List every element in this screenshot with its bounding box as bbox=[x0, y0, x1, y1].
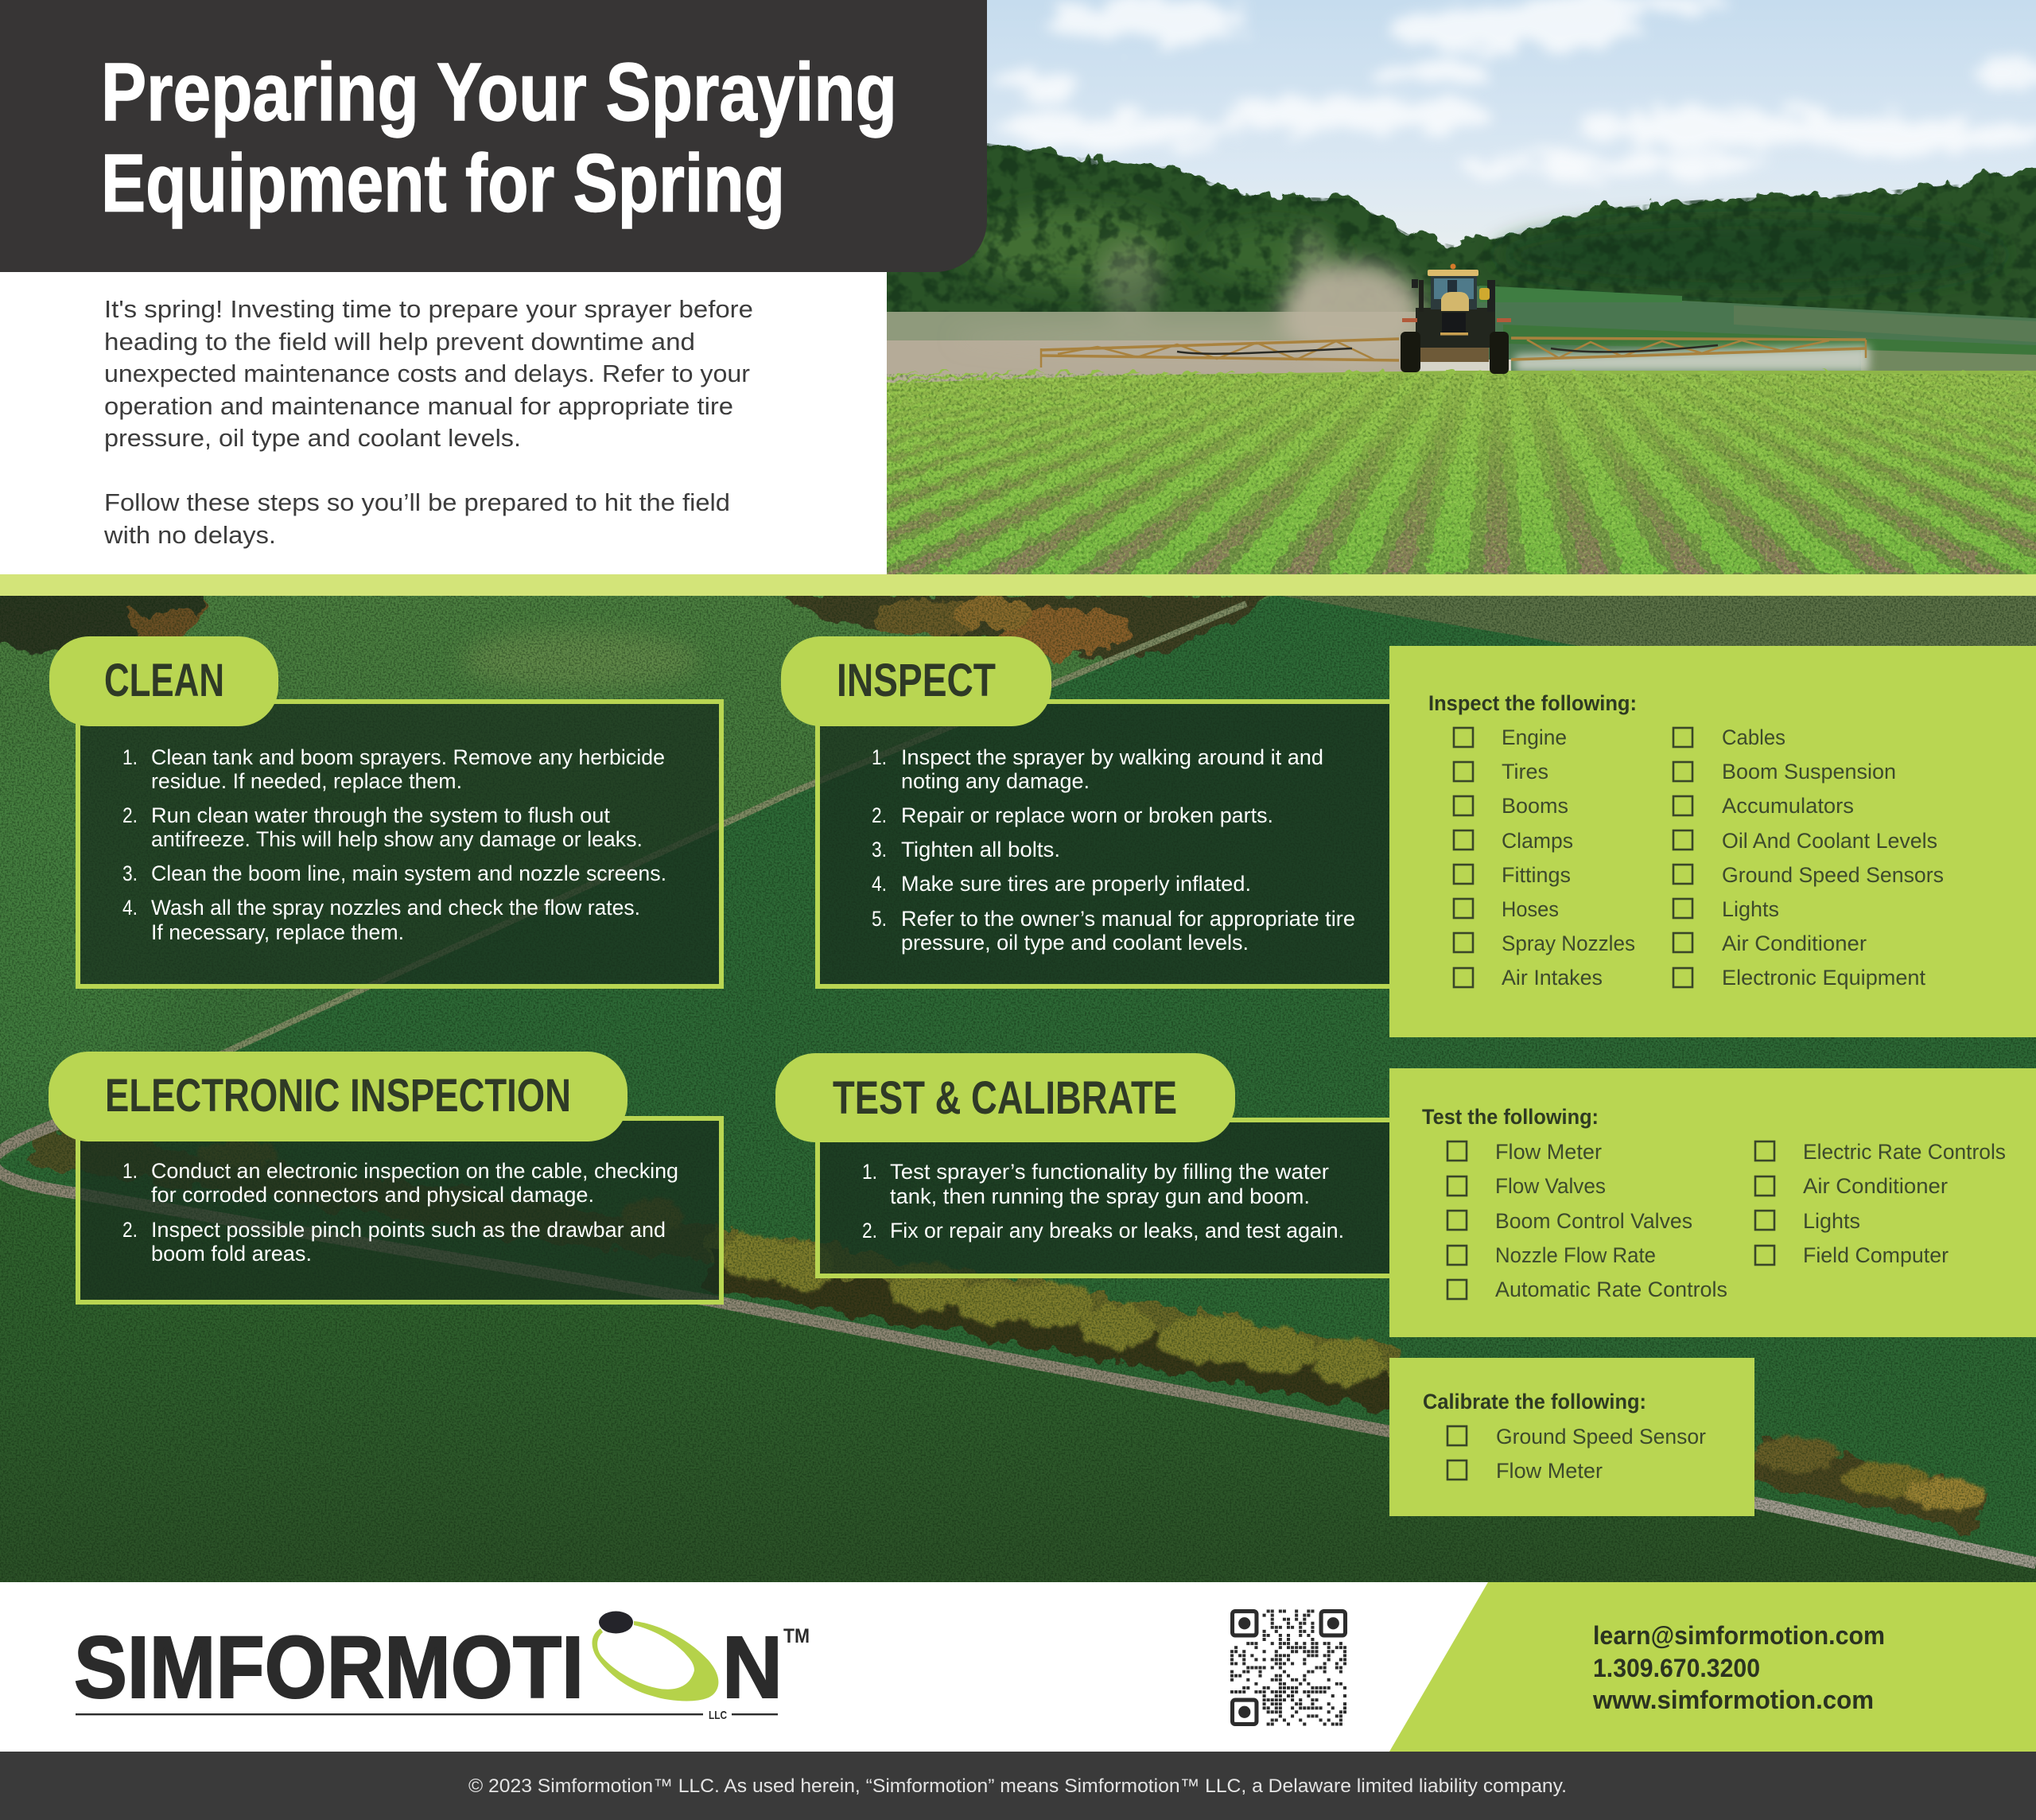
right boom bbox=[1511, 338, 1866, 360]
checklist column one: Booms bbox=[1502, 794, 1568, 818]
photo: sprayer in corn field bbox=[887, 0, 2036, 574]
QR code bbox=[1230, 1612, 1347, 1724]
wheels bbox=[1401, 332, 1420, 372]
checklist panel: calibrate the following bbox=[1389, 1358, 1754, 1516]
electronic inspection steps bbox=[122, 1159, 678, 1266]
intro text: heading to the field will help prevent downtime and bbox=[104, 328, 695, 356]
electronic inspection steps: boom fold areas. bbox=[151, 1242, 312, 1266]
clean steps: Clean the boom line, main system and nozzle screens. bbox=[151, 861, 666, 885]
title bbox=[101, 46, 897, 229]
test checklist column two: Electric Rate Controls bbox=[1803, 1140, 2006, 1164]
intro text: It's spring! Investing time to prepare your sprayer before bbox=[104, 295, 753, 323]
logo: Simformotion: TM bbox=[783, 1625, 810, 1647]
cab bbox=[1419, 280, 1424, 312]
inspect steps bbox=[872, 745, 1355, 955]
logo: Simformotion: N bbox=[722, 1619, 783, 1717]
test and calibrate heading pill bbox=[775, 1053, 1235, 1142]
crop field with rows bbox=[887, 368, 2036, 574]
test and calibrate steps bbox=[862, 1160, 1344, 1242]
checklist column two: Accumulators bbox=[1722, 794, 1854, 818]
intro text: pressure, oil type and coolant levels. bbox=[104, 424, 521, 452]
clean heading pill bbox=[49, 636, 278, 726]
checklist column one: Engine bbox=[1502, 725, 1567, 749]
checklist column one: Tires bbox=[1502, 760, 1548, 784]
test checklist column one: Flow Valves bbox=[1495, 1174, 1606, 1198]
dust plumes bbox=[1024, 223, 1431, 340]
intro text: with no delays. bbox=[103, 521, 276, 549]
inspect steps: 2. bbox=[872, 803, 887, 827]
section: inspect bbox=[781, 636, 1398, 986]
southern field bbox=[0, 1180, 2036, 1582]
email: learn@simformotion.com bbox=[1593, 1621, 1885, 1650]
checklist column two: Air Conditioner bbox=[1722, 931, 1867, 955]
phone: 1.309.670.3200 bbox=[1593, 1654, 1760, 1682]
grille bbox=[1442, 313, 1466, 332]
inspect steps: Repair or replace worn or broken parts. bbox=[901, 803, 1273, 827]
checklist column two: Lights bbox=[1722, 897, 1779, 921]
inspect steps: Inspect the sprayer by walking around it and bbox=[901, 745, 1323, 769]
test and calibrate steps: tank, then running the spray gun and boom. bbox=[890, 1184, 1310, 1208]
checklist column one: Fittings bbox=[1502, 863, 1571, 887]
contact panel bbox=[1389, 1582, 2036, 1752]
diagonal track bbox=[57, 604, 1246, 1124]
north-east olive field bbox=[1280, 596, 2036, 660]
logo: Simformotion: LLC bbox=[709, 1709, 727, 1722]
test and calibrate steps: Test sprayer’s functionality by filling the water bbox=[890, 1160, 1329, 1184]
clean steps: residue. If needed, replace them. bbox=[151, 769, 462, 793]
electronic inspection steps: Inspect possible pinch points such as the drawbar and bbox=[151, 1218, 666, 1242]
woods top-centre bbox=[783, 593, 1272, 664]
inspect steps: Refer to the owner’s manual for appropriate tire bbox=[901, 907, 1355, 931]
clean steps bbox=[122, 745, 666, 944]
checklist panel: inspect the following bbox=[1389, 646, 2036, 1037]
tail lights bbox=[1402, 318, 1417, 322]
intro text: unexpected maintenance costs and delays. Refer to your bbox=[104, 360, 750, 387]
light patch in field bbox=[461, 630, 700, 690]
section: electronic inspection bbox=[49, 1052, 721, 1302]
clean steps: 2. bbox=[122, 803, 138, 827]
test checklist column two: Air Conditioner bbox=[1803, 1174, 1948, 1198]
logo dot bbox=[599, 1612, 633, 1634]
clean steps: 3. bbox=[122, 861, 138, 885]
logo ring bbox=[593, 1621, 718, 1701]
checklist panel: calibrate the following: Flow Meter bbox=[1496, 1459, 1603, 1483]
website: www.simformotion.com bbox=[1592, 1686, 1874, 1714]
electronic inspection heading pill bbox=[49, 1052, 628, 1141]
logo: Simformotion bbox=[74, 1612, 810, 1722]
leaf texture bbox=[887, 374, 2036, 574]
distant tree line bbox=[887, 143, 2036, 318]
inspect steps: Tighten all bolts. bbox=[901, 838, 1060, 861]
road far section bbox=[1754, 1503, 2036, 1563]
inspect steps: Make sure tires are properly inflated. bbox=[901, 872, 1251, 896]
copyright bar bbox=[0, 1752, 2036, 1820]
footer band bbox=[0, 1582, 2036, 1752]
intro text: Follow these steps so you’ll be prepared to hit the field bbox=[104, 488, 730, 516]
cab roof bbox=[1428, 270, 1478, 276]
test checklist column one: Nozzle Flow Rate bbox=[1495, 1243, 1656, 1267]
photo: aerial farmland background bbox=[0, 573, 2036, 1582]
clean steps: Wash all the spray nozzles and check the flow rates. bbox=[151, 896, 640, 920]
hedgerow bbox=[32, 1139, 1984, 1511]
checklist column one: Air Intakes bbox=[1502, 966, 1603, 990]
field grain bbox=[0, 596, 2036, 1582]
electronic inspection steps: 2. bbox=[122, 1218, 138, 1242]
test checklist column one: Automatic Rate Controls bbox=[1495, 1278, 1727, 1301]
checklist panel: inspect the following: Inspect the following: bbox=[1428, 691, 1637, 715]
checklist panel: calibrate the following: Ground Speed Sensor bbox=[1496, 1425, 1706, 1449]
test checklist column two: Field Computer bbox=[1803, 1243, 1949, 1267]
brighter left field edge bbox=[0, 748, 175, 1130]
test and calibrate steps: 2. bbox=[862, 1219, 877, 1242]
intro text bbox=[103, 295, 753, 549]
north-west field bbox=[0, 596, 1272, 1161]
title: Preparing Your Spraying bbox=[101, 46, 897, 138]
inspect heading pill bbox=[781, 636, 1051, 726]
test checklist column two: Lights bbox=[1803, 1209, 1860, 1233]
test checklist column two bbox=[1755, 1140, 2006, 1267]
logo: Simformotion: SIMFORMOTI bbox=[74, 1619, 584, 1717]
spray mist bbox=[1515, 345, 1869, 372]
inspect heading pill: INSPECT bbox=[837, 655, 996, 706]
intro text: operation and maintenance manual for appropriate tire bbox=[104, 392, 733, 420]
central field bbox=[0, 596, 2036, 1582]
checklist column two: Electronic Equipment bbox=[1722, 966, 1925, 990]
checklist column two bbox=[1673, 725, 1944, 990]
electronic inspection heading pill: ELECTRONIC INSPECTION bbox=[105, 1070, 571, 1122]
electronic inspection steps: 1. bbox=[122, 1159, 138, 1183]
beacon bbox=[1451, 264, 1455, 269]
inspect steps: 5. bbox=[872, 907, 887, 931]
sprayer machine bbox=[1041, 264, 1866, 374]
hood bbox=[1441, 292, 1469, 311]
checklist panel: test the following bbox=[1389, 1068, 2036, 1337]
clean steps: 4. bbox=[122, 896, 138, 920]
inspect steps: noting any damage. bbox=[901, 769, 1090, 793]
corn rows bbox=[0, 372, 2036, 574]
checklist column two: Ground Speed Sensors bbox=[1722, 863, 1944, 887]
woods top-left bbox=[0, 573, 203, 652]
electronic inspection panel box bbox=[78, 1118, 721, 1302]
section: test and calibrate bbox=[775, 1053, 1398, 1276]
checklist column one: Hoses bbox=[1502, 897, 1559, 921]
clean steps: Run clean water through the system to flush out bbox=[151, 803, 611, 827]
checklist column two: Boom Suspension bbox=[1722, 760, 1896, 784]
section: clean bbox=[49, 636, 721, 986]
clean steps: If necessary, replace them. bbox=[151, 920, 404, 944]
copyright bar: © 2023 Simformotion™ LLC. As used herein, “Simformotion” means Simformotion™ LLC, a Delaware limited liability company. bbox=[468, 1775, 1567, 1797]
under-frame bbox=[1420, 347, 1489, 362]
test checklist column one: Boom Control Valves bbox=[1495, 1209, 1692, 1233]
clean panel box bbox=[78, 702, 721, 986]
clean steps: Clean tank and boom sprayers. Remove any herbicide bbox=[151, 745, 665, 769]
checklist column one: Spray Nozzles bbox=[1502, 931, 1635, 955]
intro panel background bbox=[0, 272, 887, 574]
inspect panel box bbox=[818, 702, 1398, 986]
test and calibrate heading pill: TEST & CALIBRATE bbox=[833, 1072, 1177, 1124]
checklist column one bbox=[1454, 725, 1635, 990]
test and calibrate steps: Fix or repair any breaks or leaks, and test again. bbox=[890, 1219, 1344, 1242]
soil furrows bbox=[290, 372, 2036, 574]
accent strip bbox=[0, 574, 2036, 596]
inspect steps: 1. bbox=[872, 745, 887, 769]
checklist column two: Cables bbox=[1722, 725, 1785, 749]
inspect steps: pressure, oil type and coolant levels. bbox=[901, 931, 1249, 955]
inspect steps: 4. bbox=[872, 872, 887, 896]
test checklist column one: Flow Meter bbox=[1495, 1140, 1602, 1164]
tractor body bbox=[1416, 308, 1495, 348]
checklist panel: test the following: Test the following: bbox=[1422, 1105, 1599, 1129]
mist under machine bbox=[1419, 360, 1511, 371]
road bbox=[0, 1124, 2036, 1563]
electronic inspection steps: for corroded connectors and physical damage. bbox=[151, 1183, 594, 1207]
clean steps: antifreeze. This will help show any damage or leaks. bbox=[151, 827, 643, 851]
checklist panel: calibrate the following: Calibrate the following: bbox=[1423, 1390, 1646, 1414]
inspect steps: 3. bbox=[872, 838, 887, 861]
side tank bbox=[1479, 288, 1490, 300]
electronic inspection steps: Conduct an electronic inspection on the cable, checking bbox=[151, 1159, 678, 1183]
sky with clouds bbox=[987, 0, 2036, 248]
boom hoses bbox=[1177, 345, 1718, 354]
title banner bbox=[0, 0, 987, 272]
background fields bbox=[887, 286, 2036, 385]
title: Equipment for Spring bbox=[101, 137, 785, 229]
clean heading pill: CLEAN bbox=[104, 655, 224, 706]
test and calibrate panel box bbox=[818, 1120, 1398, 1276]
clean steps: 1. bbox=[122, 745, 138, 769]
test and calibrate steps: 1. bbox=[862, 1160, 877, 1184]
checklist column one: Clamps bbox=[1502, 829, 1573, 853]
left boom bbox=[1041, 339, 1399, 368]
checklist column two: Oil And Coolant Levels bbox=[1722, 829, 1937, 853]
test checklist column one bbox=[1447, 1140, 1727, 1301]
